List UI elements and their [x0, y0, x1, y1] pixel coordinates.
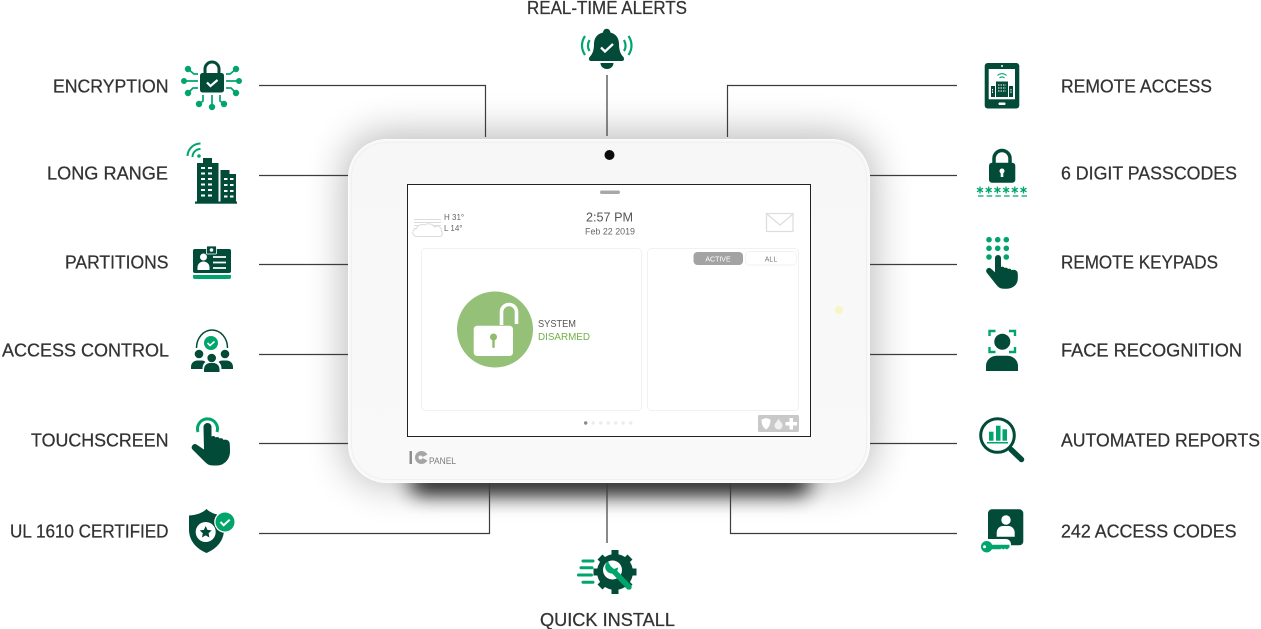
tablet device — [348, 140, 870, 482]
emergency button — [758, 415, 799, 432]
pull handle — [600, 190, 620, 194]
screen: DISARMED — [538, 331, 590, 343]
sensors panel — [648, 248, 798, 410]
label: encryption: ENCRYPTION — [53, 76, 168, 96]
label: 242 access codes: 242 ACCESS CODES — [1061, 522, 1236, 542]
page dots — [584, 421, 632, 425]
device shadow — [345, 134, 873, 494]
label: 6 digit passcodes: 6 DIGIT PASSCODES — [1061, 164, 1237, 184]
icon: encryption — [181, 62, 242, 110]
icon: remote keypads — [986, 237, 1018, 289]
status panel — [422, 248, 642, 410]
all tab — [746, 252, 796, 265]
label: remote access: REMOTE ACCESS — [1061, 76, 1212, 96]
label: touchscreen: TOUCHSCREEN — [31, 431, 168, 451]
icon: real-time alerts — [582, 29, 632, 69]
weather — [413, 213, 464, 237]
label: UL 1610 certified: UL 1610 CERTIFIED — [10, 522, 169, 542]
icon: partitions — [193, 246, 231, 279]
indicator light — [835, 306, 843, 314]
label: partitions: PARTITIONS — [65, 252, 168, 272]
label: long range: LONG RANGE — [47, 164, 168, 184]
logo: IQ panel: PANEL — [429, 456, 456, 466]
screen: Feb 22 2019 — [585, 226, 635, 236]
icon: access control — [191, 330, 233, 372]
icon: long range — [188, 143, 237, 204]
camera — [604, 150, 614, 160]
icon: 242 access codes — [978, 509, 1023, 554]
icon: quick install — [578, 550, 636, 594]
connector lines — [259, 75, 957, 543]
envelope — [766, 214, 793, 232]
icon: face recognition — [986, 331, 1018, 371]
screen — [408, 184, 810, 436]
label: access control: ACCESS CONTROL — [2, 341, 169, 361]
icon: touchscreen — [192, 419, 230, 466]
device body — [348, 140, 870, 482]
all tab: ALL — [765, 256, 777, 264]
icon: remote access — [985, 63, 1019, 108]
open padlock — [457, 292, 533, 368]
weather: L 14° — [444, 224, 462, 233]
icon: automated reports — [981, 419, 1022, 460]
label: automated reports: AUTOMATED REPORTS — [1061, 431, 1260, 451]
logo: IQ panel — [410, 451, 456, 466]
weather: H 31° — [444, 213, 464, 222]
active tab — [694, 252, 743, 265]
label: face recognition: FACE RECOGNITION — [1061, 341, 1242, 361]
active tab: ACTIVE — [705, 256, 731, 264]
icon: 6 digit passcodes — [977, 150, 1027, 196]
label: remote keypads: REMOTE KEYPADS — [1061, 252, 1218, 272]
icon: UL 1610 certified — [189, 509, 236, 553]
clock: 2:57 PM — [586, 210, 633, 224]
system status text: SYSTEM — [538, 318, 576, 330]
